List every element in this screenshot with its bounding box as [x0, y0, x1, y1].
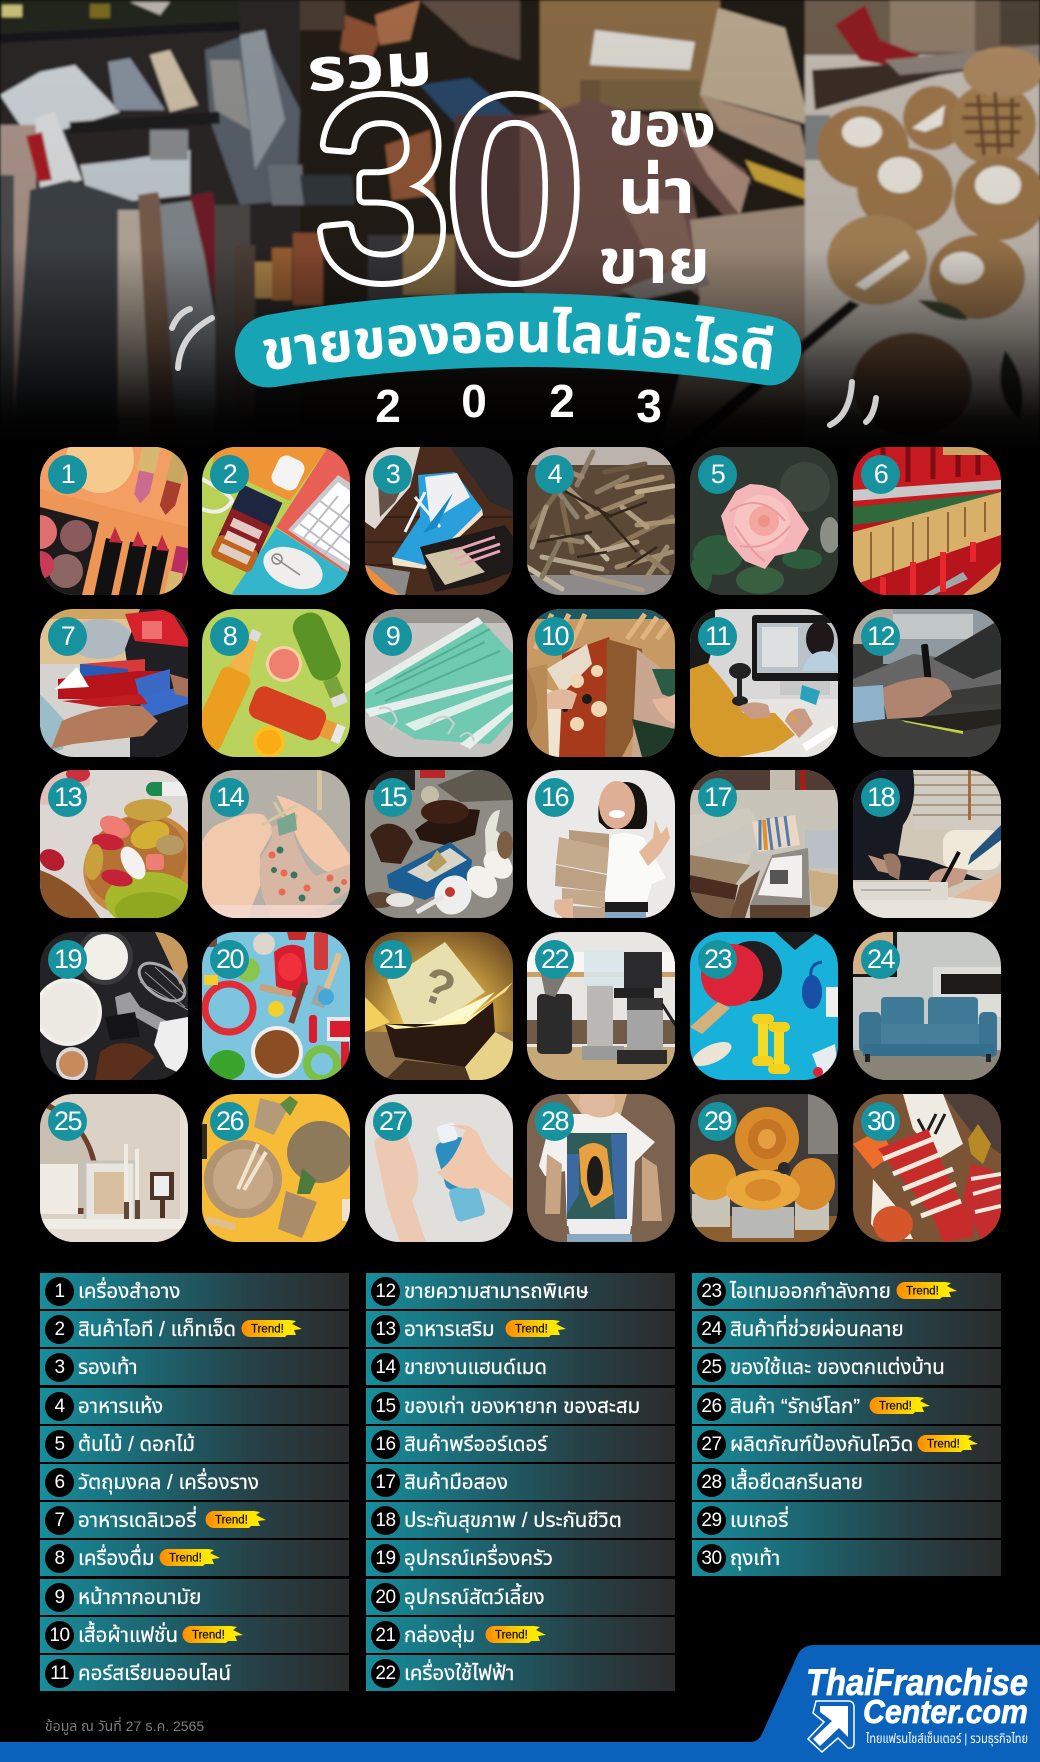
- card 5: rose: [690, 447, 838, 595]
- list row 23: [692, 1273, 1001, 1309]
- number badge 29: [698, 1102, 737, 1141]
- list row 5: [40, 1426, 349, 1462]
- list row 5: ต้นไม้ / ดอกไม้: [78, 1433, 195, 1456]
- number badge 20: 20: [216, 944, 243, 974]
- list row 20: อุปกรณ์สัตว์เลี้ยง: [404, 1586, 545, 1609]
- number badge 10: [535, 617, 574, 656]
- number badge 10: 10: [541, 621, 568, 651]
- list row 9: หน้ากากอนามัย: [78, 1586, 201, 1609]
- number badge 23: [698, 940, 737, 979]
- list row 15: ของเก่า ของหายาก ของสะสม: [404, 1395, 640, 1418]
- list row 29: 29: [701, 1510, 722, 1530]
- number badge 18: 18: [867, 782, 894, 812]
- list row 6: วัตถุมงคล / เครื่องราง: [78, 1471, 259, 1494]
- list row 7: [40, 1502, 349, 1538]
- year 2023: 2: [375, 380, 401, 432]
- number badge 23: 23: [704, 944, 731, 974]
- decorative white curved marks left: [172, 309, 212, 368]
- card 10: fashion clothes: [527, 609, 675, 757]
- list row 8: เครื่องดื่ม: [78, 1547, 154, 1570]
- card 16: pre-order woman: [527, 770, 675, 918]
- list row 2: สินค้าไอที / แก็ทเจ็ด: [78, 1318, 236, 1341]
- list row 20: 20: [375, 1586, 396, 1608]
- list row 17: สินค้ามือสอง: [404, 1471, 508, 1494]
- list row 7: Trend!: [215, 1514, 248, 1526]
- list row 10: Trend!: [192, 1630, 225, 1642]
- list row 21: กล่องสุ่ม: [404, 1624, 475, 1647]
- number badge 14: 14: [216, 782, 243, 812]
- list row 19: 19: [375, 1548, 396, 1568]
- number badge 21: 21: [379, 944, 406, 974]
- card 13: supplements: [40, 770, 188, 918]
- number badge 27: [373, 1102, 412, 1141]
- card 9: face masks: [365, 609, 513, 757]
- number badge 22: [535, 940, 574, 979]
- list row 2: Trend!: [251, 1324, 284, 1336]
- card 25: home decor: [40, 1094, 188, 1242]
- number badge 24: [861, 940, 900, 979]
- number badge 19: [48, 940, 87, 979]
- source note: ข้อมูล ณ วันที่ 27 ธ.ค. 2565: [45, 1718, 204, 1734]
- card 27: alcohol spray: [365, 1094, 513, 1242]
- list row 28: 28: [701, 1472, 722, 1492]
- number badge 26: 26: [216, 1106, 243, 1136]
- title: ของ น่า ขาย: ขาย: [598, 228, 710, 297]
- list row 24: สินค้าที่ช่วยผ่อนคลาย: [730, 1318, 904, 1341]
- number badge 12: [861, 617, 900, 656]
- year 2023: 3: [636, 380, 662, 432]
- card 26: eco goods: [202, 1094, 350, 1242]
- list row 26: Trend!: [879, 1400, 912, 1412]
- number badge 16: 16: [541, 782, 568, 812]
- number badge 17: 17: [704, 782, 731, 812]
- list row 27: ผลิตภัณฑ์ป้องกันโควิด: [730, 1433, 913, 1456]
- number badge 3: [373, 455, 412, 494]
- list row 15: [366, 1388, 675, 1424]
- card 22: electric appliances: [527, 932, 675, 1080]
- number badge 8: [210, 617, 249, 656]
- number badge 29: 29: [704, 1106, 731, 1136]
- logo: Center.com wordmark: Center.com: [863, 1693, 1028, 1730]
- card 19: kitchen tools: [40, 932, 188, 1080]
- number badge 2: 2: [223, 459, 236, 489]
- list row 17: [366, 1464, 675, 1500]
- card 20: pet supplies: [202, 932, 350, 1080]
- list row 8: [40, 1540, 349, 1576]
- card 21: mystery box: [365, 932, 513, 1080]
- card 30: socks: [853, 1094, 1001, 1242]
- card 7: food delivery: [40, 609, 188, 757]
- card 11: online course: [690, 609, 838, 757]
- list row 23: 23: [701, 1280, 722, 1302]
- number badge 28: [535, 1102, 574, 1141]
- list row 21: Trend!: [495, 1630, 528, 1642]
- card 23: sports items: [690, 932, 838, 1080]
- list row 20: [366, 1579, 675, 1615]
- card 18: insurance signing: [853, 770, 1001, 918]
- number badge 17: [698, 778, 737, 817]
- list row 19: อุปกรณ์เครื่องครัว: [404, 1547, 553, 1570]
- list row 12: ขายความสามารถพิเศษ: [404, 1280, 589, 1303]
- number badge 11: [698, 617, 737, 656]
- number badge 12: 12: [867, 621, 894, 651]
- list row 8: 8: [54, 1548, 65, 1568]
- number badge 25: [48, 1102, 87, 1141]
- card 14: handmade knitting: [202, 770, 350, 918]
- list row 3: 3: [54, 1356, 65, 1378]
- list row 4: 4: [54, 1396, 65, 1416]
- number badge 7: 7: [61, 621, 74, 651]
- number badge 9: [373, 617, 412, 656]
- number badge 6: [861, 455, 900, 494]
- list row 5: 5: [54, 1434, 65, 1454]
- number badge 26: [210, 1102, 249, 1141]
- number badge 22: 22: [541, 944, 568, 974]
- title: big outlined 30: [317, 90, 580, 287]
- number badge 18: [861, 778, 900, 817]
- list row 18: 18: [375, 1510, 396, 1530]
- list row 6: [40, 1464, 349, 1500]
- list row 2: 2: [54, 1318, 65, 1340]
- card 4: dried fish: [527, 447, 675, 595]
- number badge 4: [535, 455, 574, 494]
- list row 14: ขายงานแฮนด์เมด: [404, 1356, 547, 1379]
- list row 24: [692, 1311, 1001, 1347]
- number badge 20: [210, 940, 249, 979]
- list row 3: [40, 1349, 349, 1385]
- number badge 9: 9: [386, 621, 399, 651]
- title: ของ น่า ขาย: น่า: [618, 158, 695, 227]
- list row 29: เบเกอรี่: [730, 1509, 788, 1532]
- card 29: bakery: [690, 1094, 838, 1242]
- number badge 19: 19: [54, 944, 81, 974]
- list row 4: [40, 1388, 349, 1424]
- list row 18: [366, 1502, 675, 1538]
- list row 25: [692, 1349, 1001, 1385]
- list row 12: 12: [375, 1280, 396, 1302]
- list row 14: 14: [375, 1356, 396, 1378]
- number badge 21: [373, 940, 412, 979]
- number badge 15: [373, 778, 412, 817]
- list row 6: 6: [54, 1472, 65, 1492]
- number badge 30: 30: [867, 1106, 894, 1136]
- list row 9: 9: [54, 1586, 65, 1608]
- list row 7: 7: [54, 1510, 65, 1530]
- number badge 5: [698, 455, 737, 494]
- list row 9: [40, 1579, 349, 1615]
- list row 10: เสื้อผ้าแฟชั่น: [78, 1624, 178, 1647]
- list row 7: อาหารเดลิเวอรี่: [78, 1509, 196, 1532]
- list row 22: [366, 1655, 675, 1691]
- card 2: IT gadgets: [202, 447, 350, 595]
- number badge 24: 24: [867, 944, 894, 974]
- list row 23: ไอเทมออกกำลังกาย: [730, 1280, 891, 1303]
- number badge 6: 6: [874, 459, 887, 489]
- list row 22: 22: [375, 1662, 396, 1684]
- list row 30: [692, 1540, 1001, 1576]
- list row 27: 27: [701, 1434, 722, 1454]
- list row 8: Trend!: [169, 1552, 202, 1564]
- list row 23: Trend!: [906, 1286, 939, 1298]
- list row 27: [692, 1426, 1001, 1462]
- number badge 14: [210, 778, 249, 817]
- number badge 16: [535, 778, 574, 817]
- list row 25: ของใช้และ ของตกแต่งบ้าน: [730, 1356, 945, 1379]
- list row 24: 24: [701, 1318, 722, 1340]
- card 6: amulet tags: [853, 447, 1001, 595]
- list row 10: 10: [49, 1624, 70, 1646]
- list row 26: สินค้า “รักษ์โลก”: [730, 1395, 860, 1418]
- list row 2: [40, 1311, 349, 1347]
- year 2023: 0: [461, 375, 487, 427]
- card 24: relaxing sofa: [853, 932, 1001, 1080]
- list row 21: 21: [375, 1624, 396, 1646]
- card 15: antiques: [365, 770, 513, 918]
- list row 15: 15: [375, 1396, 396, 1416]
- number badge 27: 27: [379, 1106, 406, 1136]
- number badge 15: 15: [379, 782, 406, 812]
- number badge 25: 25: [54, 1106, 81, 1136]
- list row 13: อาหารเสริม: [404, 1318, 495, 1341]
- list row 16: [366, 1426, 675, 1462]
- list row 12: [366, 1273, 675, 1309]
- list row 11: 11: [50, 1662, 69, 1684]
- logo: arrow icon: [808, 1701, 854, 1752]
- number badge 4: 4: [548, 459, 561, 489]
- list row 17: 17: [375, 1472, 396, 1492]
- title: ของ น่า ขาย: ของ: [607, 89, 717, 162]
- decorative white curved marks right: [830, 382, 876, 425]
- list row 26: [692, 1388, 1001, 1424]
- list row 14: [366, 1349, 675, 1385]
- number badge 7: [48, 617, 87, 656]
- list row 10: [40, 1617, 349, 1653]
- card 17: second-hand books: [690, 770, 838, 918]
- number badge 28: 28: [541, 1106, 568, 1136]
- card 28: screen t-shirt: [527, 1094, 675, 1242]
- list row 1: [40, 1273, 349, 1309]
- list row 28: เสื้อยืดสกรีนลาย: [730, 1471, 863, 1494]
- list row 18: ประกันสุขภาพ / ประกันชีวิต: [404, 1509, 622, 1532]
- list row 30: ถุงเท้า: [730, 1547, 780, 1570]
- list row 29: [692, 1502, 1001, 1538]
- title: ของ น่า ขาย: [598, 89, 717, 297]
- number badge 1: [48, 455, 87, 494]
- list row 26: 26: [701, 1396, 722, 1416]
- number badge 3: 3: [386, 459, 399, 489]
- list row 1: 1: [54, 1280, 65, 1302]
- list row 30: 30: [701, 1548, 722, 1568]
- list row 13: Trend!: [515, 1324, 548, 1336]
- list row 11: [40, 1655, 349, 1691]
- number badge 13: [48, 778, 87, 817]
- list row 21: [366, 1617, 675, 1653]
- number badge 2: [210, 455, 249, 494]
- list row 4: อาหารแห้ง: [78, 1395, 163, 1418]
- list row 28: [692, 1464, 1001, 1500]
- footer: blue band and logo block: [0, 1645, 1040, 1762]
- list row 16: 16: [375, 1434, 396, 1454]
- year 2023: 2: [549, 375, 575, 427]
- list row 27: Trend!: [927, 1438, 960, 1450]
- list row 3: รองเท้า: [78, 1356, 138, 1379]
- subtitle banner: curved teal pill: ขายของออนไลน์อะไรดี: [262, 306, 774, 370]
- card 21: mystery box: ?: [415, 956, 463, 1019]
- year 2023: [375, 375, 662, 432]
- number badge 1: 1: [61, 459, 74, 489]
- list row 19: [366, 1540, 675, 1576]
- number badge 5: 5: [711, 459, 724, 489]
- card 3: sneakers: [365, 447, 513, 595]
- number badge 13: 13: [54, 782, 81, 812]
- list row 1: เครื่องสำอาง: [78, 1280, 180, 1303]
- photo: clothing rack, bags, hand and cookies: [0, 0, 1040, 450]
- list row 16: สินค้าพรีออร์เดอร์: [404, 1433, 547, 1456]
- list row 25: 25: [701, 1356, 722, 1378]
- list row 22: เครื่องใช้ไฟฟ้า: [404, 1662, 514, 1685]
- title: รวม: รวม: [305, 31, 435, 104]
- number badge 11: 11: [705, 621, 730, 651]
- number badge 8: 8: [223, 621, 236, 651]
- list row 11: คอร์สเรียนออนไลน์: [78, 1662, 231, 1685]
- card 1: cosmetics: [40, 447, 188, 595]
- list row 13: [366, 1311, 675, 1347]
- card 12: creative work: [853, 609, 1001, 757]
- header photo collage with title: [0, 0, 1040, 432]
- list row 13: 13: [375, 1318, 396, 1340]
- card 8: drinks: [202, 609, 350, 757]
- number badge 30: [861, 1102, 900, 1141]
